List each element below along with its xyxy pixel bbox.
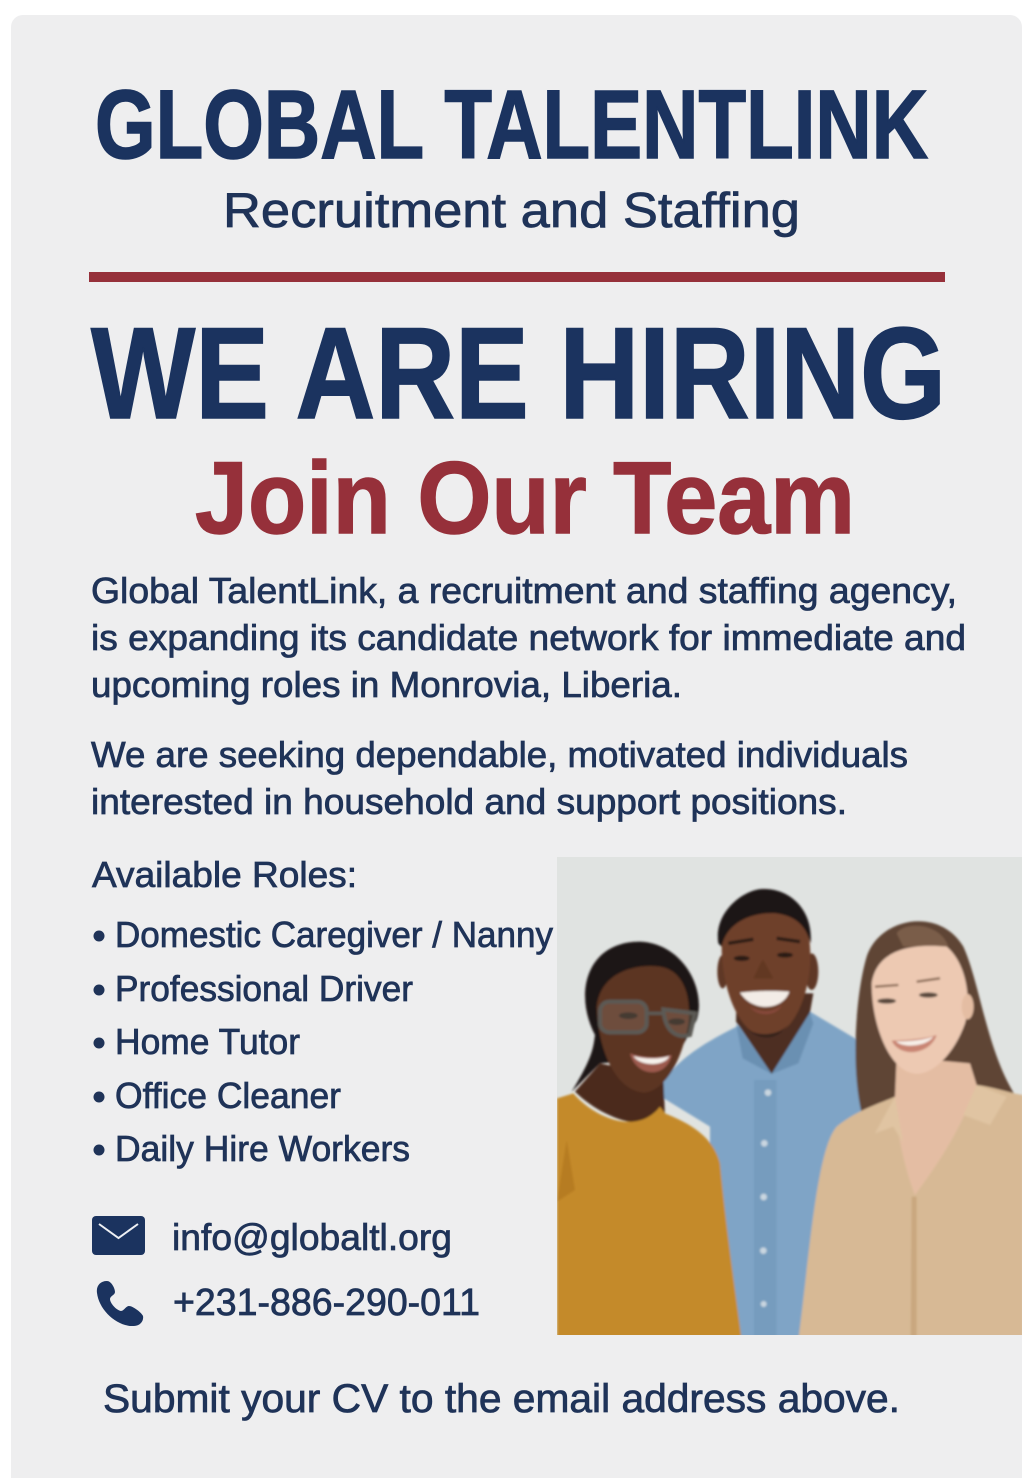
list: roles: Professional Driver xyxy=(115,968,413,1009)
text block: agency introduction: is expanding its candidate network for immediate and xyxy=(91,617,966,658)
list: roles: Daily Hire Workers xyxy=(115,1128,410,1169)
text block: agency introduction: upcoming roles in Monrovia, Liberia. xyxy=(91,664,682,705)
person: woman in mustard sweater xyxy=(557,942,742,1340)
subtitle: recruitment and staffing: Recruitment and Staffing xyxy=(223,184,800,238)
photo: three smiling team members xyxy=(557,857,1023,1340)
list: roles xyxy=(94,914,553,1169)
heading: join our team: Join Our Team xyxy=(195,441,855,555)
heading: available roles: Available Roles: xyxy=(92,854,357,895)
icon: telephone xyxy=(97,1281,143,1326)
text block: who we are seeking: We are seeking dependable, motivated individuals xyxy=(91,734,908,775)
text block: who we are seeking xyxy=(91,734,908,822)
list: roles: Home Tutor xyxy=(115,1021,300,1062)
text: email address: info@globaltl.org xyxy=(172,1217,452,1258)
list: roles: Office Cleaner xyxy=(115,1075,341,1116)
text: phone number: +231-886-290-011 xyxy=(173,1282,480,1324)
photo backdrop xyxy=(557,857,1022,1335)
text block: agency introduction: Global TalentLink, a recruitment and staffing agency, xyxy=(91,570,957,611)
text block: who we are seeking: interested in household and support positions. xyxy=(91,781,847,822)
divider: red rule xyxy=(89,272,945,282)
text block: agency introduction xyxy=(91,570,966,705)
call to action: submit cv: Submit your CV to the email address above. xyxy=(103,1377,900,1421)
person: man in blue shirt xyxy=(658,889,862,1340)
icon: envelope xyxy=(92,1216,145,1255)
list: roles: Domestic Caregiver / Nanny xyxy=(115,914,553,955)
person: woman in beige blouse xyxy=(798,921,1023,1340)
